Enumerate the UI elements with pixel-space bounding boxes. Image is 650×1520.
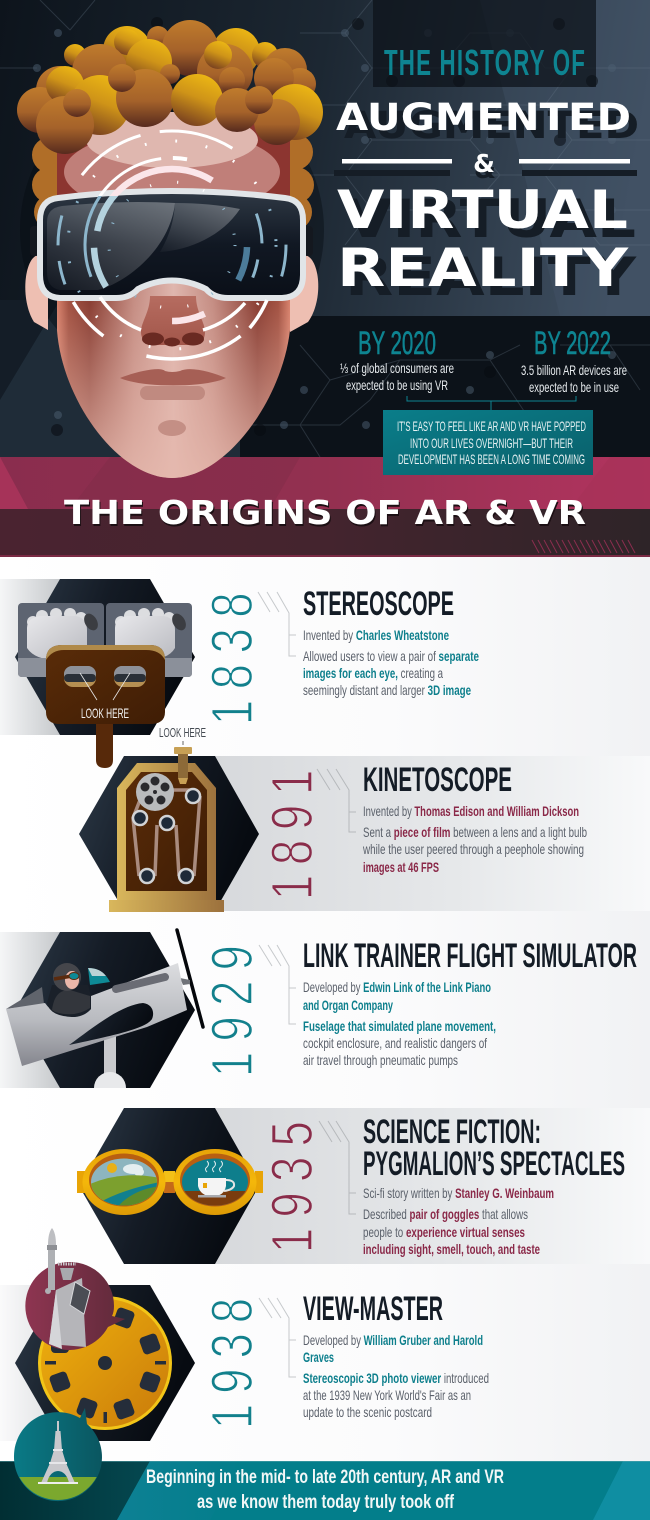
section heading: THE ORIGINS OF AR & VR bbox=[64, 493, 586, 532]
panel: 1891 kinetoscope bbox=[79, 725, 650, 912]
text: kinetoscope description: Invented by Thomas Edison and William Dickson bbox=[363, 803, 579, 819]
text: kinetoscope description bbox=[362, 803, 587, 875]
stat: by 2020: expected to be using VR bbox=[346, 377, 448, 393]
nose and mouth bbox=[120, 296, 226, 436]
text: science fiction description bbox=[363, 1185, 554, 1257]
text: link trainer description: cockpit enclosure, and realistic dangers of bbox=[303, 1035, 487, 1051]
text: link trainer description bbox=[303, 979, 496, 1068]
label: look here: LOOK HERE bbox=[159, 725, 206, 740]
connector 1838 bbox=[258, 592, 296, 656]
header panel bbox=[0, 0, 650, 557]
panel: 1938 view-master bbox=[0, 1228, 195, 1501]
forehead bbox=[57, 112, 290, 214]
text: view-master description: Developed by William Gruber and Harold bbox=[303, 1332, 483, 1348]
text: stereoscope description: seemingly distant and larger 3D image bbox=[303, 682, 471, 698]
icon: view-master reel bbox=[38, 1296, 172, 1430]
text: view-master description bbox=[303, 1332, 489, 1420]
callout bbox=[383, 410, 593, 475]
year 1891: 1891 bbox=[261, 770, 325, 900]
text: link trainer description: Fuselage that simulated plane movement, bbox=[303, 1018, 496, 1034]
text: view-master description: Graves bbox=[303, 1349, 334, 1365]
icon: stereoscope viewer bbox=[46, 645, 165, 768]
text: science fiction description: people to experience virtual senses bbox=[363, 1224, 525, 1240]
year 1935: 1935 bbox=[261, 1121, 325, 1253]
heading: view-master: VIEW-MASTER bbox=[303, 1290, 443, 1328]
hair curls bbox=[17, 20, 323, 154]
footer banner bbox=[0, 1461, 650, 1520]
panel: 1838 stereoscope bbox=[0, 579, 195, 768]
title: the history of: THE HISTORY OF bbox=[384, 44, 585, 83]
connector 1938 bbox=[259, 1298, 296, 1377]
year 1929: 1929 bbox=[201, 945, 265, 1077]
VR headset bbox=[40, 191, 303, 298]
text: science fiction description: Described pair of goggles that allows bbox=[363, 1206, 528, 1222]
footer text: Beginning in the mid- to late 20th century, AR and VR bbox=[146, 1467, 504, 1488]
heading: science fiction bbox=[363, 1113, 625, 1183]
year 1938: 1938 bbox=[201, 1298, 265, 1429]
heading: kinetoscope: KINETOSCOPE bbox=[363, 761, 512, 799]
title: reality: REALITY bbox=[337, 238, 629, 299]
text: science fiction description: including sight, smell, touch, and taste bbox=[363, 1241, 540, 1257]
heading: stereoscope: STEREOSCOPE bbox=[303, 585, 454, 623]
stat: by 2022 bbox=[521, 325, 627, 395]
bracket connector bbox=[407, 396, 576, 410]
text: view-master description: Stereoscopic 3D photo viewer introduced bbox=[303, 1370, 489, 1386]
panel: 1935 science fiction bbox=[77, 1108, 534, 1264]
text: link trainer description: Developed by Edwin Link of the Link Piano bbox=[303, 979, 491, 995]
HUD arcs bbox=[56, 130, 288, 361]
text: view-master description: update to the scenic postcard bbox=[303, 1404, 432, 1420]
connector 1935 bbox=[319, 1121, 356, 1214]
hair back bbox=[32, 134, 314, 230]
text: science fiction description: Sci-fi story written by Stanley G. Weinbaum bbox=[363, 1185, 554, 1201]
connector 1891 bbox=[317, 769, 356, 832]
text: stereoscope description: images for each eye, creating a bbox=[303, 665, 443, 681]
connector 1929 bbox=[259, 945, 296, 1024]
footer text: as we know them today truly took off bbox=[197, 1492, 455, 1513]
icon: statue of liberty bubble bbox=[25, 1228, 125, 1350]
text: stereoscope description: Allowed users to view a pair of separate bbox=[303, 648, 479, 664]
icon: kinetoscope bbox=[109, 747, 224, 912]
icon: flight simulator plane bbox=[6, 930, 203, 1104]
text: link trainer description: air travel through pneumatic pumps bbox=[303, 1052, 458, 1068]
ears bbox=[25, 226, 318, 332]
illustration: head with VR headset bbox=[12, 20, 332, 478]
stat: by 2020: BY 2020 bbox=[358, 325, 436, 361]
face bbox=[57, 140, 290, 478]
panel: 1929 link trainer bbox=[0, 930, 203, 1104]
footer text bbox=[146, 1467, 504, 1513]
stat: by 2020 bbox=[340, 325, 454, 393]
icon: goggles bbox=[77, 1149, 263, 1215]
ampersand divider bbox=[334, 149, 637, 178]
text: view-master description: at the 1939 New York World's Fair as an bbox=[303, 1387, 471, 1403]
title: augmented: AUGMENTED bbox=[336, 96, 631, 139]
text: link trainer description: and Organ Company bbox=[303, 997, 393, 1013]
year 1838: 1838 bbox=[201, 592, 265, 725]
hatch marks bbox=[532, 540, 635, 553]
title: virtual: VIRTUAL bbox=[337, 180, 628, 241]
text: kinetoscope description: Sent a piece of film between a lens and a light bulb bbox=[363, 824, 587, 840]
label: look here bbox=[159, 725, 206, 745]
text: stereoscope description: Invented by Charles Wheatstone bbox=[303, 627, 449, 643]
text: stereoscope description bbox=[303, 627, 479, 698]
icon: stereoscope viewer: LOOK HERE bbox=[81, 705, 129, 721]
icon: stereoscope card bbox=[18, 603, 192, 677]
stat: by 2020: ⅓ of global consumers are bbox=[340, 360, 454, 376]
text: kinetoscope description: images at 46 FPS bbox=[363, 859, 439, 875]
ampersand divider: & bbox=[473, 149, 495, 178]
icon: eiffel tower bubble bbox=[14, 1408, 102, 1501]
